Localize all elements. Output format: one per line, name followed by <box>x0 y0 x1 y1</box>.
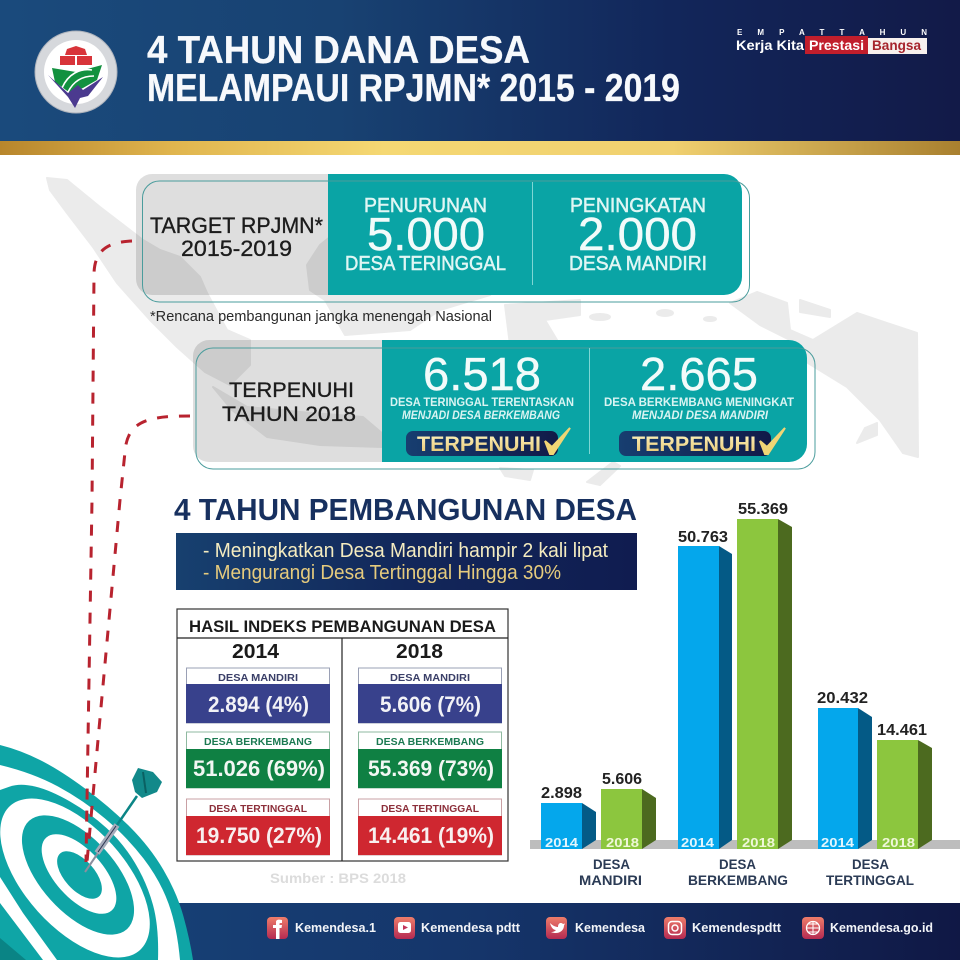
bars: desa berkembang: DESA <box>719 856 756 872</box>
icon: dart <box>85 768 162 872</box>
background map of Indonesia <box>47 178 918 485</box>
banner: highlights: - Meningkatkan Desa Mandiri hampir 2 kali lipat <box>203 540 608 562</box>
2018 desa mandiri <box>358 668 502 723</box>
panel: terpenuhi tahun 2018: TERPENUHI <box>229 378 354 402</box>
2014 desa berkembang: 51.026 (69%) <box>193 756 325 781</box>
bars: desa berkembang: 55.369 <box>738 501 788 518</box>
bars: desa mandiri: 2.898 <box>541 785 582 802</box>
2014 desa mandiri: DESA MANDIRI <box>218 672 298 684</box>
panel: target RPJMN: 2015-2019 <box>181 236 292 261</box>
banner: highlights: - Mengurangi Desa Tertinggal Hingga 30% <box>203 562 561 584</box>
2018 desa tertinggal: DESA TERTINGGAL <box>381 803 480 815</box>
bars: desa mandiri: MANDIRI <box>579 872 642 888</box>
bars: desa mandiri: 2018 <box>606 835 639 850</box>
header band <box>0 0 960 155</box>
panel: terpenuhi tahun 2018: 2.665 <box>640 348 758 400</box>
panel: terpenuhi tahun 2018: DESA BERKEMBANG MENINGKAT <box>604 397 794 409</box>
badge: terpenuhi 1 <box>406 428 570 456</box>
2018 desa mandiri: 5.606 (7%) <box>380 692 481 717</box>
panel: hasil indeks pembangunan desa table: HASIL INDEKS PEMBANGUNAN DESA <box>189 617 496 636</box>
bars: desa tertinggal: 2014 <box>821 835 855 850</box>
footnote: *Rencana pembangunan jangka menengah Nasional <box>150 308 492 325</box>
dashed red leader lines <box>86 241 190 862</box>
2014 desa mandiri <box>186 668 330 723</box>
label: Kemendesa pdtt: Kemendesa pdtt <box>421 920 521 935</box>
campaign mark: Kerja Kita Prestasi Bangsa <box>736 28 927 54</box>
2014 desa mandiri: 2.894 (4%) <box>208 692 309 717</box>
bars: desa tertinggal: 2018 <box>882 835 915 850</box>
footer band <box>0 903 960 960</box>
2018 desa tertinggal: 14.461 (19%) <box>368 823 494 848</box>
campaign mark: Kerja Kita Prestasi Bangsa: Kerja Kita <box>736 37 804 53</box>
label: Kemendesa: Kemendesa <box>575 920 646 935</box>
bars: desa mandiri: 2014 <box>545 835 579 850</box>
2018 desa tertinggal <box>358 799 502 855</box>
bars: desa berkembang <box>678 501 792 888</box>
icon: facebook <box>267 917 288 939</box>
panel: hasil indeks pembangunan desa table <box>177 609 508 861</box>
title: MELAMPAUI RPJMN* 2015 - 2019 <box>147 67 680 110</box>
panel: target RPJMN: PENINGKATAN <box>570 195 706 217</box>
2018 desa berkembang: 55.369 (73%) <box>368 756 494 781</box>
2018 desa berkembang <box>358 732 502 788</box>
campaign mark: Kerja Kita Prestasi Bangsa: E M P A T T A H U N <box>737 28 927 37</box>
campaign mark: Kerja Kita Prestasi Bangsa: Bangsa <box>872 38 921 53</box>
panel: target RPJMN <box>136 174 750 302</box>
icon: twitter <box>546 917 567 939</box>
bar chart <box>530 501 960 888</box>
bars: desa tertinggal <box>817 690 932 888</box>
social links <box>267 917 933 939</box>
icon: instagram <box>664 917 686 939</box>
bars: desa mandiri: DESA <box>593 856 630 872</box>
panel: target RPJMN: 5.000 <box>367 208 485 260</box>
2014 desa tertinggal <box>186 799 330 855</box>
badge: terpenuhi 2 <box>619 428 785 456</box>
panel: terpenuhi tahun 2018: TAHUN 2018 <box>222 402 356 426</box>
label: Kemendesa.1: Kemendesa.1 <box>295 920 376 935</box>
panel: target RPJMN: TARGET RPJMN* <box>150 213 323 238</box>
badge: terpenuhi 2: TERPENUHI <box>632 433 756 456</box>
bars: desa tertinggal: TERTINGGAL <box>826 872 914 888</box>
panel: terpenuhi tahun 2018: DESA TERINGGAL TERENTASKAN <box>390 397 574 409</box>
label: Kemendespdtt: Kemendespdtt <box>692 920 782 935</box>
panel: hasil indeks pembangunan desa table: 2014 <box>232 641 280 663</box>
panel: target RPJMN: PENURUNAN <box>364 195 487 217</box>
panel: hasil indeks pembangunan desa table: 2018 <box>396 641 443 663</box>
title: 4 TAHUN DANA DESA <box>147 29 530 72</box>
2014 desa tertinggal: 19.750 (27%) <box>196 823 322 848</box>
2018 desa berkembang: DESA BERKEMBANG <box>376 736 484 748</box>
banner: highlights <box>176 533 637 590</box>
campaign mark: Kerja Kita Prestasi Bangsa: Prestasi <box>809 38 864 53</box>
bars: desa tertinggal: 20.432 <box>817 690 868 707</box>
bars: desa mandiri <box>541 771 656 888</box>
panel: target RPJMN: DESA MANDIRI <box>569 253 707 275</box>
bars: desa tertinggal: 14.461 <box>877 722 927 739</box>
panel: terpenuhi tahun 2018: MENJADI DESA MANDIRI <box>632 410 769 422</box>
bars: desa tertinggal: DESA <box>852 856 889 872</box>
panel: target RPJMN: 2.000 <box>578 208 697 260</box>
panel: target RPJMN: DESA TERINGGAL <box>345 253 506 275</box>
source note: Sumber : BPS 2018 <box>270 870 406 886</box>
target board <box>0 745 193 960</box>
bars: desa mandiri: 5.606 <box>602 771 642 788</box>
icon: youtube <box>394 917 415 939</box>
panel: terpenuhi tahun 2018: 6.518 <box>423 348 541 400</box>
panel: terpenuhi tahun 2018 <box>193 340 815 469</box>
2018 desa mandiri: DESA MANDIRI <box>390 672 470 684</box>
label: Kemendesa.go.id: Kemendesa.go.id <box>830 920 933 935</box>
bars: desa berkembang: 2018 <box>742 835 775 850</box>
section heading: 4 TAHUN PEMBANGUNAN DESA <box>174 492 637 527</box>
badge: terpenuhi 1: TERPENUHI <box>417 433 541 456</box>
bars: desa berkembang: BERKEMBANG <box>688 872 788 888</box>
title <box>147 29 680 110</box>
2014 desa berkembang: DESA BERKEMBANG <box>204 736 312 748</box>
2014 desa berkembang <box>186 732 330 788</box>
panel: terpenuhi tahun 2018: MENJADI DESA BERKEMBANG <box>402 410 560 422</box>
bars: desa berkembang: 2014 <box>681 835 715 850</box>
ministry logo <box>35 31 117 113</box>
icon: website <box>802 917 824 939</box>
bars: desa berkembang: 50.763 <box>678 529 728 546</box>
2014 desa tertinggal: DESA TERTINGGAL <box>209 803 308 815</box>
